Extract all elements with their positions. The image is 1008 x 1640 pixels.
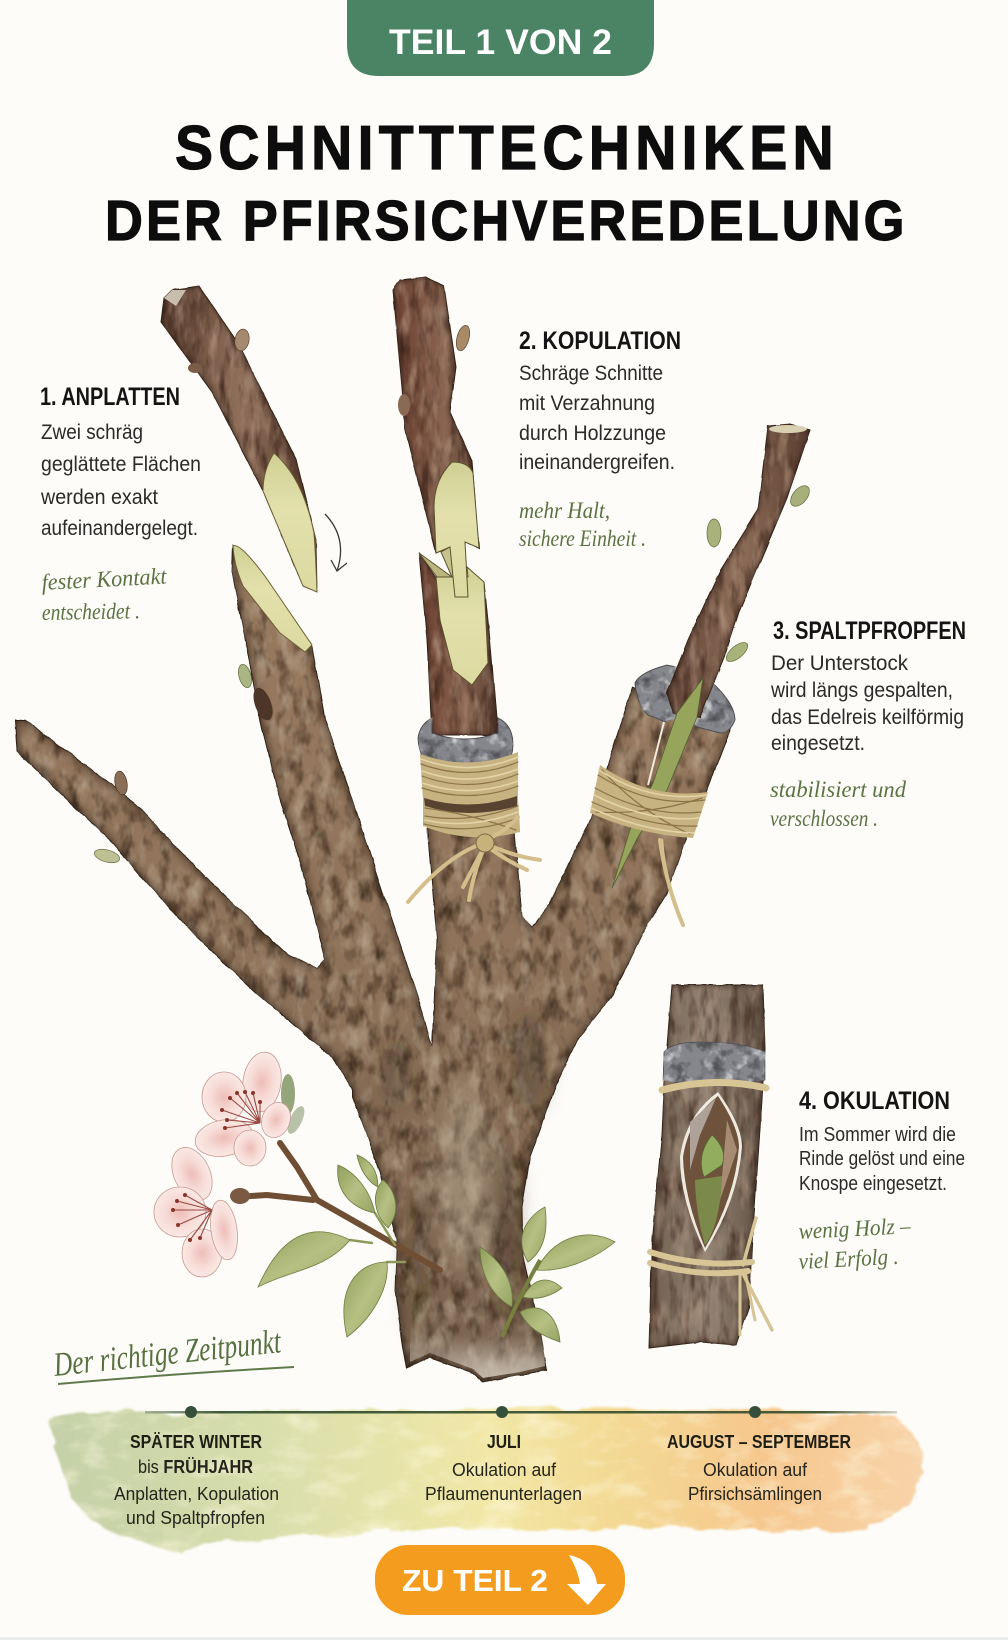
period 3: AUGUST – SEPTEMBER	[667, 1431, 851, 1452]
handwritten note: stabilisiert und	[770, 777, 906, 802]
period 2: Okulation auf	[452, 1459, 557, 1480]
label 3: Spaltpfropfen	[770, 617, 966, 831]
period 1: Anplatten, Kopulation	[114, 1483, 279, 1504]
leaves	[258, 1155, 396, 1337]
cut surfaces: Kopulation joint	[419, 462, 488, 685]
scion: Anplatten upper twig	[161, 286, 317, 592]
body text: das Edelreis keilförmig	[771, 706, 964, 729]
period 1	[114, 1431, 279, 1528]
illustration: grafted tree	[15, 277, 966, 1615]
handwritten note: verschlossen .	[770, 806, 878, 831]
scion: Kopulation upper twig	[393, 277, 479, 553]
body text: durch Holzzunge	[519, 422, 666, 445]
badge: Teil 1 von 2	[347, 0, 654, 76]
heading: 3. SPALTPFROPFEN	[773, 617, 966, 645]
period 2	[425, 1431, 582, 1504]
body text: ineinandergreifen.	[519, 451, 675, 474]
handwritten note	[41, 563, 168, 625]
raffia binding: Spaltpfropfen	[590, 765, 708, 925]
tree trunk and branches	[15, 545, 733, 1382]
handwritten note: mehr Halt,	[519, 498, 610, 523]
handwritten note: fester Kontakt	[41, 563, 168, 595]
blossom branch	[154, 514, 615, 1342]
period 2: JULI	[487, 1431, 521, 1452]
label 4: Okulation	[798, 1087, 965, 1274]
period 1: und Spaltpfropfen	[126, 1507, 265, 1528]
stick: Okulation	[649, 985, 772, 1348]
body text	[519, 362, 675, 474]
body text	[799, 1124, 965, 1195]
body text: Zwei schräg	[41, 421, 143, 444]
body text: Rinde gelöst und eine	[799, 1148, 965, 1170]
handwritten note	[770, 777, 906, 831]
scion wedge: Spaltpfropfen	[612, 678, 703, 888]
handwritten note	[798, 1213, 912, 1274]
timeline heading: Der richtige Zeitpunkt	[51, 1323, 284, 1384]
period 1: bis FRÜHJAHR	[138, 1456, 253, 1477]
body text: Schräge Schnitte	[519, 362, 663, 385]
body text: werden exakt	[40, 486, 158, 509]
heading: 1. ANPLATTEN	[40, 383, 180, 411]
period 1: SPÄTER WINTER	[130, 1431, 262, 1452]
body text: geglättete Flächen	[41, 453, 201, 476]
handwritten note: sichere Einheit .	[519, 526, 646, 551]
flower upper	[192, 1050, 295, 1166]
timeline heading	[51, 1323, 294, 1384]
icon: curved down arrow	[567, 1555, 606, 1605]
sealing wax band: Spaltpfropfen	[635, 665, 735, 733]
handwritten note: entscheidet .	[42, 598, 140, 625]
bud slit	[680, 1092, 742, 1252]
handwritten note	[519, 498, 646, 551]
button: Zu Teil 2: ZU TEIL 2	[402, 1563, 548, 1598]
lower raffia tie	[650, 1218, 772, 1335]
title	[105, 113, 904, 252]
badge: Teil 1 von 2: TEIL 1 VON 2	[389, 23, 612, 62]
sprig at trunk	[480, 1207, 615, 1342]
scion: Spaltpfropfen upper twig	[667, 424, 813, 717]
flower lower	[154, 1141, 241, 1277]
heading: 2. KOPULATION	[519, 327, 681, 355]
rootstock: Kopulation	[419, 553, 498, 735]
period 3: Pfirsichsämlingen	[688, 1483, 822, 1504]
flower buds	[230, 1074, 308, 1204]
body text	[40, 421, 201, 540]
handwritten note: viel Erfolg .	[798, 1244, 899, 1274]
body text	[770, 652, 964, 755]
body text: Der Unterstock	[771, 652, 908, 675]
heading: 4. OKULATION	[799, 1087, 950, 1115]
timeline	[51, 1406, 924, 1551]
body text: Im Sommer wird die	[799, 1124, 956, 1146]
small curved arrow	[325, 514, 347, 571]
body text: mit Verzahnung	[519, 392, 655, 415]
twigs	[235, 1143, 440, 1270]
body text: Knospe eingesetzt.	[799, 1173, 947, 1195]
body text: eingesetzt.	[771, 732, 865, 755]
period 3: Okulation auf	[703, 1459, 808, 1480]
label 1: Anplatten	[40, 383, 201, 625]
sealing wax band: Kopulation	[418, 718, 513, 768]
handwritten note: wenig Holz –	[798, 1213, 912, 1244]
timeline line and dots	[145, 1406, 897, 1418]
period 2: Pflaumenunterlagen	[425, 1483, 582, 1504]
button: Zu Teil 2	[375, 1545, 625, 1615]
body text: wird längs gespalten,	[770, 679, 953, 702]
period 3	[667, 1431, 851, 1504]
watercolor band	[51, 1408, 924, 1551]
title: DER PFIRSICHVEREDELUNG	[105, 188, 904, 252]
body text: aufeinandergelegt.	[41, 517, 198, 540]
cut surface: Anplatten stock	[233, 546, 312, 652]
label 2: Kopulation	[519, 327, 681, 551]
title: SCHNITTTECHNIKEN	[175, 113, 834, 183]
upper raffia tie	[662, 1082, 766, 1090]
raffia binding: Kopulation	[408, 752, 540, 902]
sealing wax band	[663, 1042, 765, 1086]
